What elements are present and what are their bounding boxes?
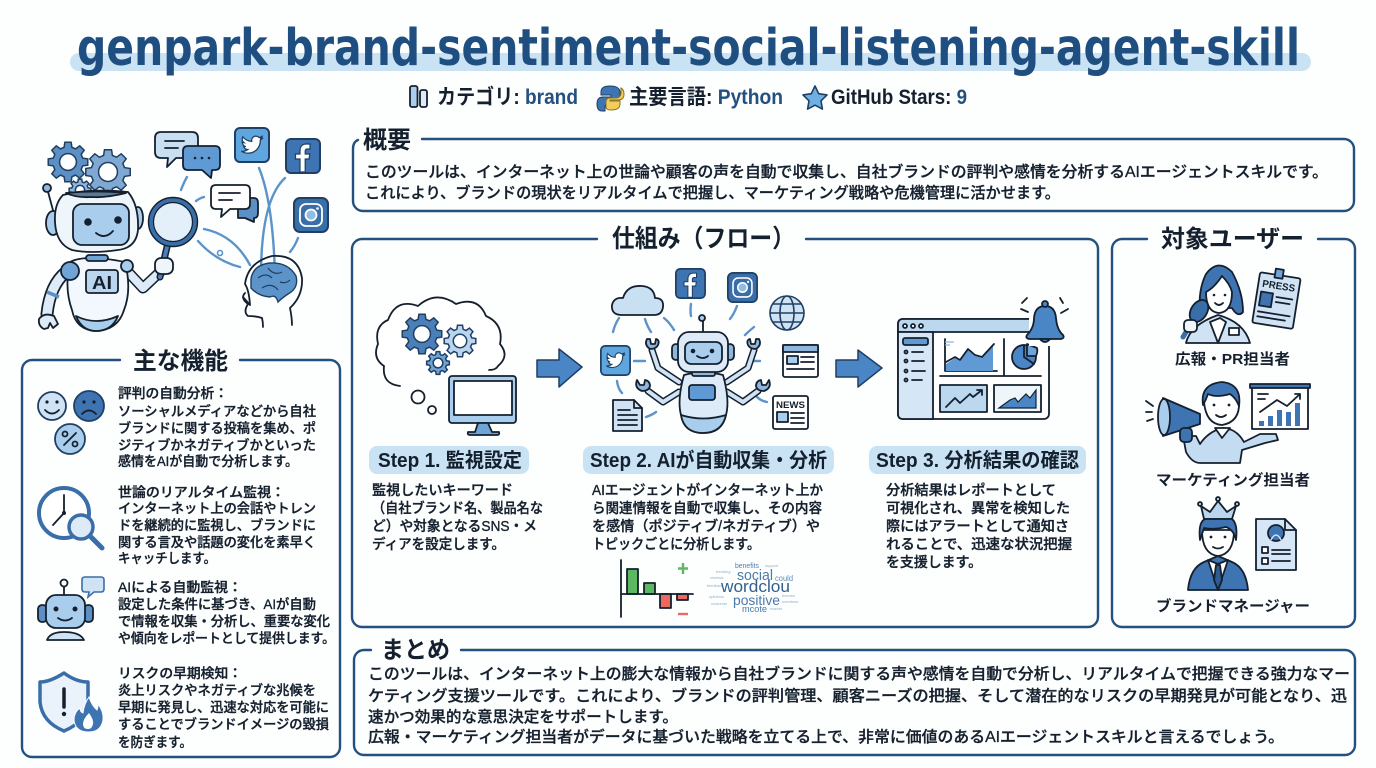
step 2 text xyxy=(592,481,823,553)
heading: target users: 対象ユーザー xyxy=(1161,226,1304,253)
icon: PR woman with microphone xyxy=(1183,265,1250,343)
word cloud: could xyxy=(775,574,793,583)
feature 2 text: キャッチします。 xyxy=(118,551,216,566)
step 1 text: （自社ブランド名、製品名な xyxy=(372,499,543,517)
arrow: step 1 to step 2 xyxy=(537,349,582,387)
word cloud: opinions xyxy=(709,594,724,599)
step 1 text: ど）や対象となるSNS・メ xyxy=(372,517,537,535)
robot xyxy=(39,184,160,331)
feature 4 text: 炎上リスクやネガティブな兆候を xyxy=(118,682,316,698)
word cloud: mcote xyxy=(742,604,767,614)
icon: browser window xyxy=(783,345,818,377)
step 1 illustration: thought cloud and monitor xyxy=(376,297,516,435)
step 2 text: ら関連情報を自動で収集し、その内容 xyxy=(592,500,822,517)
step 2 text: を感情（ポジティブ/ネガティブ）や xyxy=(592,517,820,535)
word cloud: feedback xyxy=(707,583,723,588)
icon: star xyxy=(803,86,827,109)
feature 2 icon: clock and magnifier xyxy=(39,488,102,548)
feature 2 text: インターネット上の会話やトレン xyxy=(118,501,316,516)
summary text: 広報・マーケティング担当者がデータに基づいた戦略を立てる上で、非常に価値のあるAIエージェントスキルと言えるでしょう。 xyxy=(368,727,1284,746)
icon: magnifier xyxy=(148,198,198,277)
word cloud: trending xyxy=(716,569,730,574)
word cloud: customer xyxy=(711,601,728,606)
feature 1 text: ジティブかネガティブかといった xyxy=(118,437,316,453)
overview text: これにより、ブランドの現状をリアルタイムで把握し、マーケティング戦略や危機管理に活かせます。 xyxy=(365,183,1060,202)
step 1 text: ディアを設定します。 xyxy=(372,535,505,553)
hero illustration: AI robot and social listening xyxy=(39,128,328,331)
feature 1 icon: sentiment xyxy=(38,391,104,454)
icon: twitter xyxy=(601,346,630,375)
feature 2 text: ドを継続的に監視し、ブランドに xyxy=(118,517,316,533)
feature 4 text: することでブランドイメージの毀損 xyxy=(118,716,330,732)
feature 2 text: 関する言及や話題の変化を素早く xyxy=(118,535,316,550)
feature 1 text: ソーシャルメディアなどから自社 xyxy=(118,403,317,419)
feature 1 text: ブランドに関する投稿を集め、ポ xyxy=(118,420,316,436)
label: PR: 広報・PR担当者 xyxy=(1175,350,1290,368)
step 3 badge: Step 3. 分析結果の確認 xyxy=(876,449,1079,472)
feature 3 text: で情報を収集・分析し、重要な変化 xyxy=(118,614,331,629)
feature 3 text: や傾向をレポートとして提供します。 xyxy=(118,631,335,646)
heading: features: 主な機能 xyxy=(133,348,228,375)
bar chart: positive and negative xyxy=(621,560,693,617)
feature 3 text: 設定した条件に基づき、AIが自動 xyxy=(118,596,316,612)
word cloud: market xyxy=(770,606,783,611)
summary text: このツールは、インターネット上の膨大な情報から自社ブランドに関する声や感情を自動で分析し、リアルタイムで把握できる強力なマー xyxy=(368,664,1350,683)
overview text xyxy=(365,162,1328,202)
feature 1 text: 感情をAIが自動で分析します。 xyxy=(118,453,298,469)
panel: overview xyxy=(353,127,1354,211)
feature 2 text: 世論のリアルタイム監視： xyxy=(118,485,285,500)
icon: profile document xyxy=(1256,519,1296,570)
summary text: ケティング支援ツールです。これにより、ブランドの評判管理、顧客ニーズの把握、そして潜在的なリスクの早期発見が可能となり、迅 xyxy=(368,686,1347,705)
icon: instagram xyxy=(294,198,328,232)
step 3 text: 可視化され、異常を検知した xyxy=(886,500,1070,517)
robot: AI xyxy=(92,273,112,293)
icon: cloud xyxy=(612,286,663,315)
panel: target users xyxy=(1112,226,1355,627)
icon: marketing person with megaphone xyxy=(1146,382,1278,463)
step 1 text xyxy=(372,482,543,553)
category label: カテゴリ: brand xyxy=(437,85,578,109)
arrow: step 2 to step 3 xyxy=(836,350,882,387)
label: brand manager: ブランドマネージャー xyxy=(1156,597,1310,615)
overview text: このツールは、インターネット上の世論や顧客の声を自動で収集し、自社ブランドの評判や感情を分析するAIエージェントスキルです。 xyxy=(365,162,1328,181)
feature 3 text: AIによる自動監視： xyxy=(118,580,242,595)
word cloud: positive xyxy=(733,592,780,608)
icon: chat bubbles xyxy=(155,132,258,222)
heading: overview: 概要 xyxy=(363,127,411,154)
heading: flow: 仕組み（フロー） xyxy=(612,225,795,253)
word cloud xyxy=(707,563,798,614)
robot with four arms xyxy=(636,315,770,433)
step 2 text: AIエージェントがインターネット上か xyxy=(592,481,823,499)
icon: gears xyxy=(48,142,130,201)
word cloud: support xyxy=(765,563,779,568)
step 3 text: 際にはアラートとして通知さ xyxy=(886,518,1069,535)
step 1 badge: Step 1. 監視設定 xyxy=(378,449,522,472)
metadata row xyxy=(410,85,967,111)
feature 1 text xyxy=(118,386,317,469)
feature 2 text xyxy=(118,485,316,566)
icon: press badge xyxy=(1252,266,1302,329)
heading: summary: まとめ xyxy=(381,637,450,664)
step 1 text: 監視したいキーワード xyxy=(372,482,513,499)
icon: globe xyxy=(770,296,804,330)
step 2 illustration: robot with data sources xyxy=(601,269,818,433)
icon: brand manager with crown xyxy=(1188,497,1248,590)
icon: python xyxy=(597,86,624,111)
panel: features xyxy=(22,348,340,757)
word cloud: benefits xyxy=(735,563,759,570)
icon: press badge: PRESS xyxy=(1261,279,1296,295)
feature 4 text: を防ぎます。 xyxy=(118,735,192,750)
feature 4 text: 早期に発見し、迅速な対応を可能に xyxy=(118,700,329,715)
step 2 text: トピックごとに分析します。 xyxy=(592,535,760,553)
word cloud: social xyxy=(737,567,773,584)
icon: facebook xyxy=(286,139,320,173)
feature 4 icon: shield and flame xyxy=(40,673,103,732)
icon: facebook xyxy=(676,269,705,298)
feature 3 text xyxy=(118,580,335,646)
word cloud: wordclou xyxy=(720,577,790,596)
icon: twitter xyxy=(235,128,269,162)
icon: head with brain xyxy=(243,256,302,327)
step 3 text: を支援します。 xyxy=(886,554,982,571)
icon: presentation board xyxy=(1250,384,1310,429)
summary text xyxy=(368,664,1350,746)
word cloud: themes xyxy=(782,593,795,598)
step 3 text: 分析結果はレポートとして xyxy=(886,482,1056,499)
feature 4 text: リスクの早期検知： xyxy=(118,665,242,681)
word cloud: reviews xyxy=(710,575,724,580)
summary text: 速かつ効果的な意思決定をサポートします。 xyxy=(368,708,678,726)
icon: news: NEWS xyxy=(776,400,805,410)
icon: instagram xyxy=(728,273,757,302)
panel: summary xyxy=(354,637,1355,755)
label: marketing: マーケティング担当者 xyxy=(1156,471,1310,489)
step 2 badge: Step 2. AIが自動収集・分析 xyxy=(590,448,827,472)
feature 1 text: 評判の自動分析： xyxy=(118,386,228,401)
icon: news xyxy=(773,396,808,429)
panel: flow xyxy=(352,225,1098,627)
step 3 illustration: dashboard and alert bell xyxy=(898,298,1068,419)
stars label: GitHub Stars: 9 xyxy=(831,86,967,109)
feature 3 icon: robot xyxy=(38,577,104,640)
step 3 text: れることで、迅速な状況把握 xyxy=(886,536,1072,553)
step 3 text xyxy=(886,482,1072,571)
language label: 主要言語: Python xyxy=(629,86,783,109)
word cloud: mentions xyxy=(782,599,798,604)
connector lines xyxy=(181,168,298,276)
connector dashes xyxy=(613,304,767,417)
icon: category phones xyxy=(410,86,427,107)
feature 4 text xyxy=(118,665,330,750)
icon: document xyxy=(613,400,642,431)
